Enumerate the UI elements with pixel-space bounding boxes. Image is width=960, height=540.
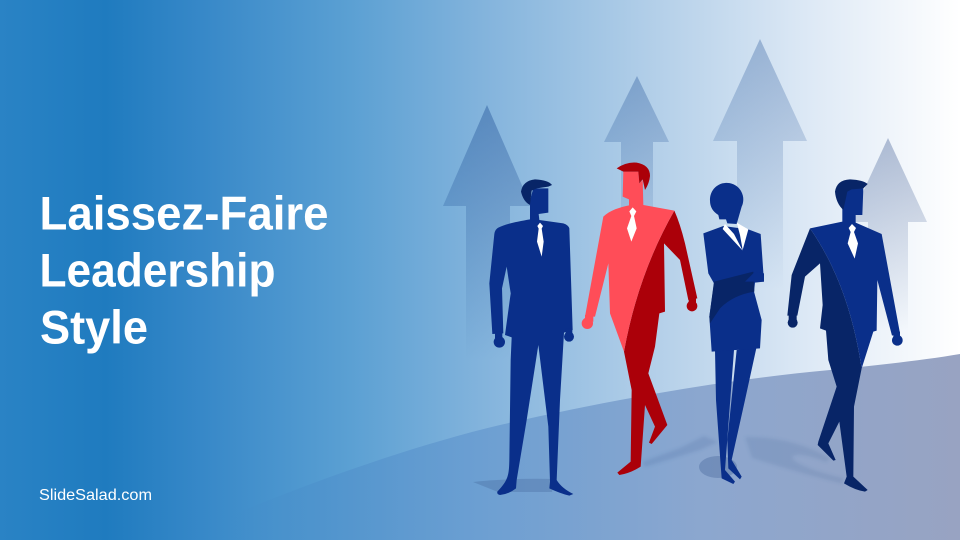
arrow: far left [443,105,531,400]
floor shadows [473,436,843,492]
hands [495,328,572,338]
ground [230,354,960,540]
person: man in red [582,163,697,475]
brand: SlideSalad.com [39,487,152,504]
title: Leadership [40,244,276,296]
title: Style [40,300,148,354]
person: woman [703,183,764,484]
hair [521,179,552,205]
light half [585,172,674,352]
arrow: far right [849,138,927,360]
hair [835,179,868,210]
arm shadow [709,272,754,323]
light half [810,188,900,368]
title [40,186,328,354]
arrow: centre left [604,76,669,340]
tie [848,224,858,259]
dark half [787,228,868,492]
person: man right [787,179,903,492]
collar [723,223,748,251]
forearm [745,272,764,282]
tie [627,207,637,242]
title: Laissez-Faire [40,186,328,240]
tie [537,223,544,257]
hair [617,163,650,190]
head [710,183,743,224]
legs [715,347,757,484]
person: man left [489,179,574,496]
dark half [617,211,697,475]
body [703,226,764,352]
arrow: tall centre right [713,39,807,350]
